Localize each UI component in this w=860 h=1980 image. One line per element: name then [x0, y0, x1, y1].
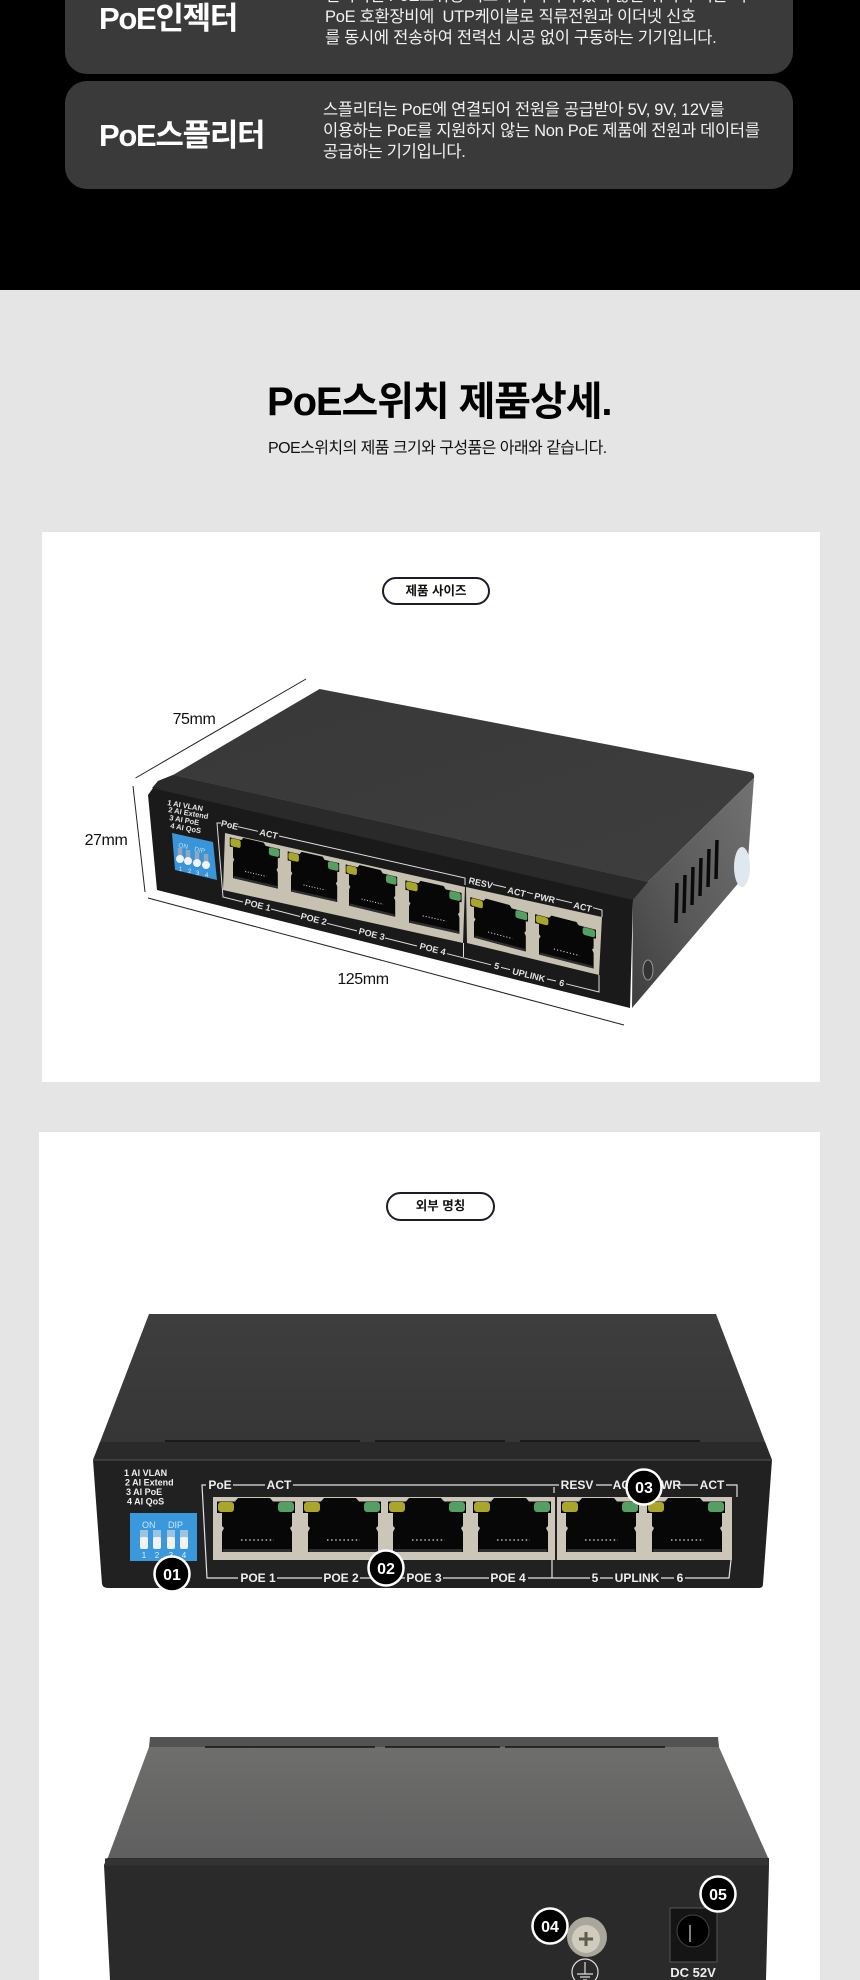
- DIP labels: 3 AI PoE: [126, 1487, 162, 1497]
- DIP labels: 2 AI Extend: [168, 805, 210, 821]
- right side: [632, 778, 754, 1008]
- top lip: [149, 1737, 719, 1747]
- DIP labels: 4 AI QoS: [170, 821, 202, 835]
- port labels: ACT: [259, 827, 279, 841]
- DIP labels: [124, 1468, 174, 1506]
- DIP labels: 2 AI Extend: [125, 1478, 174, 1488]
- badge 03: [626, 1470, 662, 1504]
- port labels: 6: [558, 978, 565, 989]
- port labels: ACT: [267, 1478, 292, 1492]
- badge 02: 02: [377, 1561, 395, 1578]
- description: PoE splitter: 스플리터는 PoE에 연결되어 전원을 공급받아 5V, 9V, 12V를: [323, 101, 724, 119]
- DIP labels: [167, 798, 210, 835]
- port labels: RESV: [468, 875, 494, 891]
- DIP switch: 2: [188, 869, 192, 875]
- DIP switch: 4: [205, 873, 209, 879]
- port labels: POE 2: [300, 911, 328, 927]
- badge 02: [368, 1550, 404, 1586]
- dimension: 75mm: [136, 679, 306, 778]
- ethernet ports: [217, 1498, 725, 1552]
- DIP switch: 1: [142, 1551, 147, 1560]
- DIP switch: [172, 833, 217, 880]
- port labels: PWR: [653, 1478, 681, 1492]
- DIP labels: 3 AI PoE: [169, 813, 200, 827]
- description: PoE injector: PoE 호환장비에 UTP케이블로 직류전원과 이더넷 신호: [325, 8, 696, 26]
- top plate: [173, 689, 754, 882]
- badge 04: [532, 1908, 568, 1944]
- port labels: UPLINK: [615, 1571, 660, 1585]
- DIP labels: 4 AI QoS: [127, 1496, 164, 1506]
- switch front view: [39, 1132, 820, 1980]
- badge 04: 04: [541, 1919, 559, 1936]
- description: PoE splitter: [323, 100, 760, 163]
- port labels: POE 3: [406, 1571, 442, 1585]
- port labels: UPLINK: [511, 966, 547, 984]
- section subtitle: POE스위치의 제품 크기와 구성품은 아래와 같습니다.: [268, 440, 607, 457]
- bracket lines: [202, 1485, 737, 1578]
- port labels: ACT: [700, 1478, 725, 1492]
- bracket lines: [217, 823, 602, 992]
- ground screw: [567, 1917, 607, 1957]
- port labels: ACT: [507, 885, 527, 899]
- front face: [148, 775, 648, 1008]
- port labels: PoE: [220, 818, 239, 832]
- description: PoE splitter: 공급하는 기기입니다.: [323, 143, 466, 161]
- port labels: 5: [493, 961, 500, 972]
- dimension: 125mm: [148, 898, 624, 1025]
- pill label: external names: 외부 명칭: [416, 1199, 465, 1213]
- switch rear view: [39, 1132, 820, 1980]
- DIP switch: 3: [169, 1551, 174, 1560]
- port labels: 6: [677, 1571, 684, 1585]
- pill label: product size: 제품 사이즈: [406, 584, 466, 598]
- port labels: POE 1: [240, 1571, 276, 1585]
- dimension: 27mm: [85, 786, 145, 892]
- DC power jack: [670, 1908, 717, 1962]
- DIP labels: 1 AI VLAN: [167, 798, 204, 813]
- DIP switch: 2: [155, 1551, 160, 1560]
- description: PoE splitter: 이용하는 PoE를 지원하지 않는 Non PoE 제품에 전원과 데이터를: [323, 122, 760, 140]
- rear face: [104, 1858, 769, 1980]
- description: PoE injector: [325, 0, 747, 49]
- port labels: ACT: [573, 900, 593, 914]
- port labels: ACT: [613, 1478, 638, 1492]
- DIP switch: 1: [179, 867, 183, 873]
- DIP switch: ON: [178, 842, 189, 851]
- top plate: [100, 1314, 765, 1442]
- pill label: external names: [386, 1192, 495, 1221]
- port labels: [220, 818, 593, 989]
- badge 01: 01: [163, 1567, 181, 1584]
- port labels: PoE: [208, 1478, 232, 1492]
- ground symbol: [572, 1959, 598, 1980]
- port labels: [208, 1478, 725, 1585]
- card: PoE splitter: [65, 81, 793, 189]
- badge 03: 03: [635, 1480, 653, 1497]
- DIP switch: [130, 1513, 197, 1561]
- DC 52V label: DC 52V: [670, 1965, 716, 1980]
- DIP switch: DIP: [194, 846, 206, 855]
- diagram: switch with dimensions: [42, 532, 820, 1082]
- dimension: 27mm: 27mm: [85, 832, 127, 849]
- DIP switch: ON: [142, 1520, 156, 1530]
- panel: external names: [39, 1132, 820, 1980]
- DIP switch: 3: [196, 871, 200, 877]
- port labels: RESV: [561, 1478, 593, 1492]
- heading: PoE injector: PoE인젝터: [99, 1, 237, 36]
- port labels: 5: [592, 1571, 599, 1585]
- description: PoE injector: 를 동시에 전송하여 전력선 시공 없이 구동하는 기기입니다.: [325, 29, 716, 47]
- DIP switch: 4: [182, 1551, 187, 1560]
- switch angled view: [148, 689, 754, 1008]
- port labels: POE 1: [244, 897, 272, 913]
- pill label: product size: [382, 577, 490, 605]
- port labels: PWR: [533, 891, 557, 905]
- ethernet ports: [230, 835, 596, 969]
- section title: PoE스위치 제품상세.: [267, 380, 611, 424]
- dimension: 125mm: 125mm: [337, 971, 389, 988]
- DIP labels: 1 AI VLAN: [124, 1468, 167, 1478]
- port labels: POE 3: [358, 926, 386, 942]
- port labels: POE 2: [323, 1571, 359, 1585]
- card: PoE injector: [65, 0, 793, 74]
- badge 01: [154, 1556, 190, 1592]
- badge 05: 05: [709, 1887, 727, 1904]
- dimension: 75mm: 75mm: [173, 711, 215, 728]
- port frames: [213, 1497, 732, 1560]
- panel: product size: [42, 532, 820, 1082]
- port labels: POE 4: [490, 1571, 526, 1585]
- port frames: [223, 833, 602, 975]
- heading: PoE splitter: PoE스플리터: [99, 118, 264, 153]
- black intro section: [0, 0, 860, 290]
- badge 05: [700, 1876, 736, 1912]
- top plate: [107, 1747, 769, 1860]
- front face: [93, 1442, 772, 1588]
- port labels: POE 4: [419, 941, 447, 957]
- DIP switch: DIP: [168, 1520, 183, 1530]
